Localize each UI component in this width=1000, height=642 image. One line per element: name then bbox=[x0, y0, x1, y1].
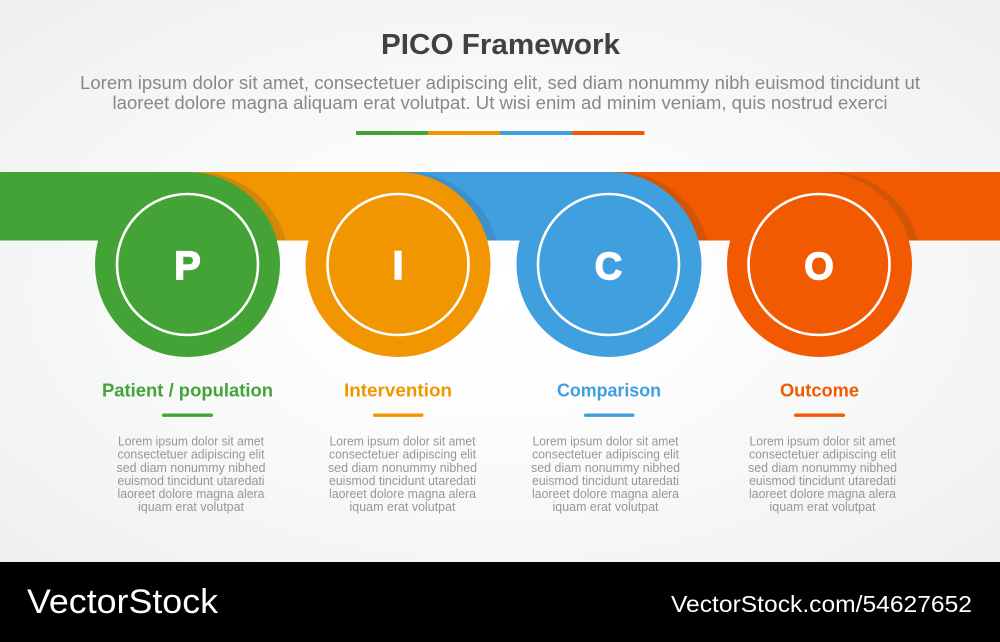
heading: Comparison bbox=[557, 380, 661, 400]
ribbon and circles bbox=[0, 172, 1000, 357]
footer image id: VectorStock.com/54627652 bbox=[671, 591, 972, 617]
description: sed diam nonummy nibhed bbox=[531, 461, 680, 475]
title: PICO Framework bbox=[381, 29, 621, 61]
description: euismod tincidunt utaredati bbox=[532, 474, 679, 488]
description: euismod tincidunt utaredati bbox=[749, 474, 896, 488]
description: euismod tincidunt utaredati bbox=[118, 474, 264, 488]
description: consectetuer adipiscing elit bbox=[118, 448, 265, 462]
description bbox=[328, 434, 477, 514]
ring and letter C bbox=[538, 194, 679, 335]
underline bbox=[794, 414, 845, 417]
heading: Outcome bbox=[780, 380, 859, 400]
ring and letter P bbox=[117, 194, 258, 335]
description: consectetuer adipiscing elit bbox=[329, 448, 477, 462]
ring and letter P: P bbox=[174, 244, 201, 288]
description: sed diam nonummy nibhed bbox=[748, 461, 897, 475]
description: laoreet dolore magna alera bbox=[749, 487, 896, 501]
shadow: patient circle bbox=[192, 172, 286, 240]
description bbox=[531, 434, 680, 514]
shadow: comparison circle bbox=[614, 172, 708, 240]
description: euismod tincidunt utaredati bbox=[329, 474, 476, 488]
description bbox=[116, 434, 266, 514]
description: sed diam nonummy nibhed bbox=[328, 461, 477, 475]
circle: comparison bbox=[516, 172, 702, 357]
intro text bbox=[80, 73, 920, 113]
circle: patient bbox=[95, 172, 280, 357]
description: iquam erat volutpat bbox=[350, 500, 456, 514]
ring and letter O: O bbox=[804, 246, 834, 288]
description: laoreet dolore magna alera bbox=[532, 487, 679, 501]
band: comparison bbox=[0, 172, 609, 240]
ring and letter I bbox=[328, 194, 468, 335]
column: comparison bbox=[531, 380, 680, 514]
ring and letter I: I bbox=[392, 244, 404, 288]
intro text: Lorem ipsum dolor sit amet, consectetuer adipiscing elit, sed diam nonummy nibh euismod tincidunt ut bbox=[80, 73, 920, 93]
description: consectetuer adipiscing elit bbox=[532, 448, 680, 462]
column: intervention bbox=[328, 380, 477, 514]
column: patient / population bbox=[102, 380, 273, 514]
ring and letter C: C bbox=[595, 246, 622, 288]
description: Lorem ipsum dolor sit amet bbox=[532, 434, 679, 448]
footer logo text: VectorStock bbox=[27, 583, 219, 621]
shadow: outcome circle bbox=[824, 172, 918, 240]
intro text: laoreet dolore magna aliquam erat volutpat. Ut wisi enim ad minim veniam, quis nostrud exerci bbox=[112, 93, 888, 113]
shadow: intervention circle bbox=[404, 172, 496, 240]
band: patient bbox=[0, 172, 188, 240]
circle: intervention bbox=[306, 172, 490, 357]
band: outcome bbox=[0, 172, 1000, 240]
underline bbox=[373, 414, 424, 417]
description bbox=[748, 434, 897, 514]
ring and letter O bbox=[748, 194, 890, 335]
description: laoreet dolore magna alera bbox=[329, 487, 476, 501]
heading: Intervention bbox=[344, 380, 452, 400]
description: Lorem ipsum dolor sit amet bbox=[750, 434, 896, 448]
description: Lorem ipsum dolor sit amet bbox=[118, 434, 264, 448]
column: outcome bbox=[748, 380, 897, 514]
circle: outcome bbox=[727, 172, 912, 357]
underline bbox=[584, 414, 634, 417]
description: sed diam nonummy nibhed bbox=[116, 461, 266, 475]
footer bar bbox=[0, 562, 1000, 642]
description: laoreet dolore magna alera bbox=[118, 487, 265, 501]
underline bbox=[162, 414, 213, 417]
description: consectetuer adipiscing elit bbox=[749, 448, 897, 462]
description: Lorem ipsum dolor sit amet bbox=[330, 434, 476, 448]
title divider: four colours bbox=[356, 131, 644, 135]
description: iquam erat volutpat bbox=[552, 500, 659, 514]
heading: Patient / population bbox=[102, 380, 273, 400]
description: iquam erat volutpat bbox=[138, 500, 245, 514]
band: intervention bbox=[0, 172, 398, 240]
description: iquam erat volutpat bbox=[770, 500, 876, 514]
